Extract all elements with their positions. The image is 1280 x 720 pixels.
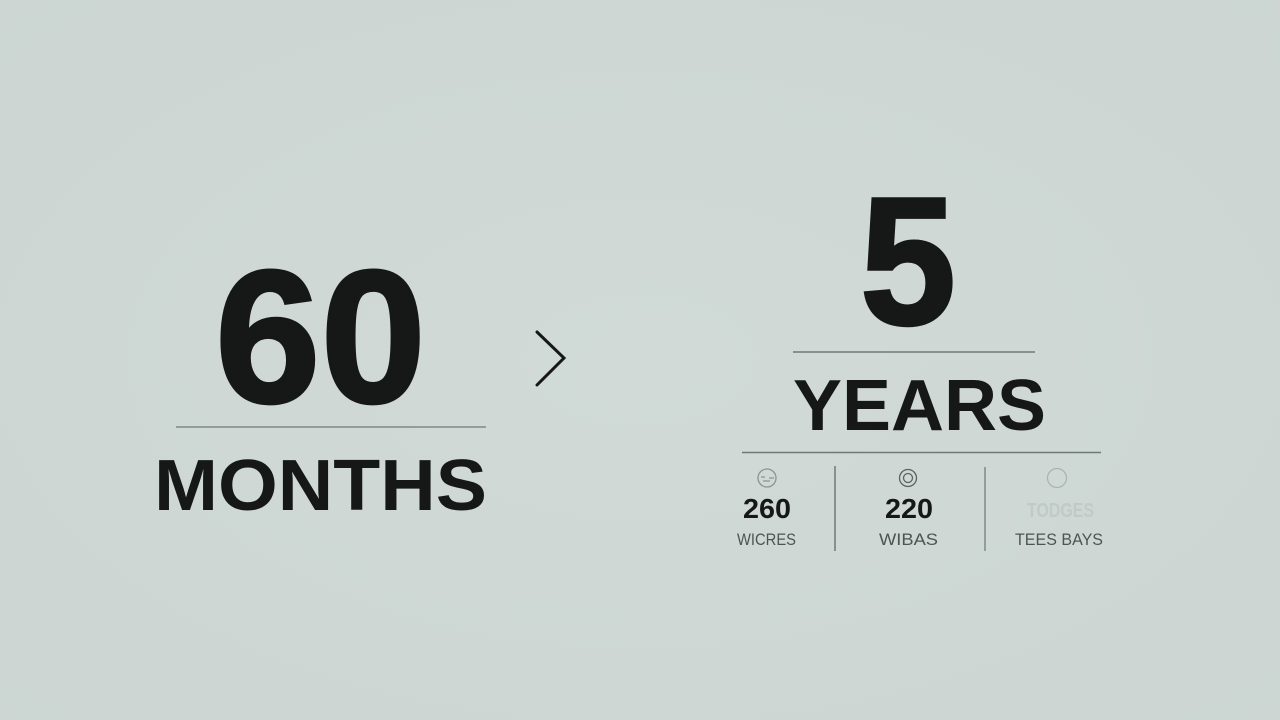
value: 220: 220	[885, 493, 933, 524]
big number 5: 5	[860, 159, 956, 363]
caption: tees bays: TEES BAYS	[1015, 530, 1103, 549]
stat: faded	[1015, 468, 1103, 549]
panel: years	[742, 159, 1101, 452]
big number 60: 60	[215, 232, 426, 443]
value: 260: 260	[743, 493, 791, 524]
stat: 260	[737, 469, 796, 549]
stat: 220	[879, 470, 938, 549]
arrow: chevron	[537, 332, 564, 385]
icon: target	[900, 470, 916, 486]
value: faded: TODGES	[1027, 500, 1094, 522]
panel: months	[154, 232, 487, 526]
label: years: YEARS	[793, 366, 1046, 446]
caption: 220: WIBAS	[879, 530, 938, 549]
icon: faded circle	[1048, 468, 1066, 488]
icon: face	[758, 469, 776, 487]
caption: 260: WICRES	[737, 530, 796, 549]
label: months: MONTHS	[154, 446, 487, 526]
